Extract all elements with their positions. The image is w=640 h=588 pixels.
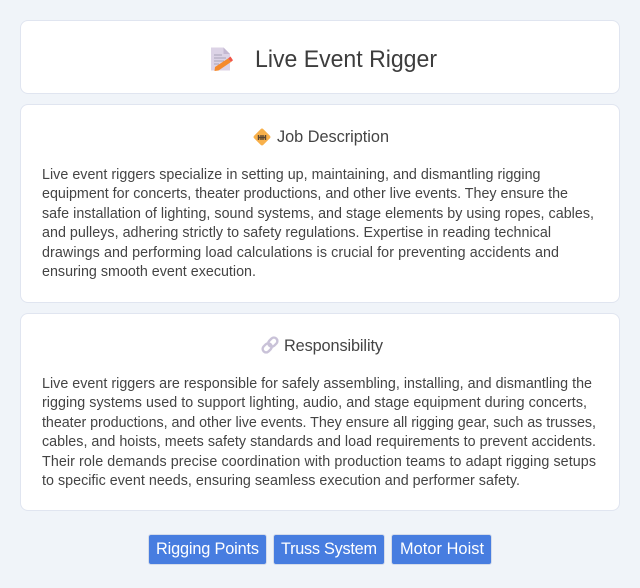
- heading: job description: Job Description: [277, 128, 389, 146]
- tag: rigging points: [148, 534, 267, 565]
- tag: truss system: [273, 534, 385, 565]
- icon: orange diamond sign: [254, 128, 270, 146]
- text block: job description: and pulleys, adhering strictly to safety regulations. Expertise in reading technical: [42, 225, 551, 241]
- tag: truss system: Truss System: [281, 540, 377, 558]
- panel: title card: [20, 20, 620, 94]
- text block: job description: drawings and performing load calculations is crucial for preventing accidents and: [42, 245, 559, 261]
- text block: job description: Live event riggers specialize in setting up, maintaining, and dismantling rigging: [42, 167, 541, 183]
- text block: responsibility: cables, and hoists, meets safety standards and load requirements to prevent accidents.: [42, 434, 596, 450]
- text block: responsibility: theater productions, and other live events. They ensure all rigging gear, such as trusses,: [42, 415, 596, 431]
- panel: responsibility: [20, 313, 620, 511]
- text block: responsibility: Live event riggers are responsible for safely assembling, installing, and dismantling the: [42, 376, 592, 392]
- panel: job description: [20, 104, 620, 303]
- tag: motor hoist: Motor Hoist: [400, 540, 484, 558]
- heading: responsibility: Responsibility: [284, 337, 384, 355]
- text block: job description: equipment for concerts, theater productions, and other live events. They ensure the: [42, 186, 568, 202]
- text block: responsibility: to specific event needs, ensuring seamless execution and performer safety.: [42, 473, 520, 489]
- text block: job description: ensuring smooth event execution.: [42, 264, 256, 280]
- text block: job description: [42, 167, 594, 280]
- text block: job description: safe installation of lighting, sound systems, and stage elements by using ropes, cables,: [42, 206, 594, 222]
- text block: responsibility: Their role demands precise coordination with production teams to adapt rigging setups: [42, 454, 596, 470]
- tag: motor hoist: [391, 534, 492, 565]
- text block: responsibility: rigging systems used to support lighting, audio, and stage equipment during concerts,: [42, 395, 587, 411]
- title: Live Event Rigger: [255, 46, 437, 73]
- icon: chain link: [262, 336, 278, 354]
- tag: rigging points: Rigging Points: [156, 540, 259, 558]
- icon: document with pencil: [211, 48, 233, 71]
